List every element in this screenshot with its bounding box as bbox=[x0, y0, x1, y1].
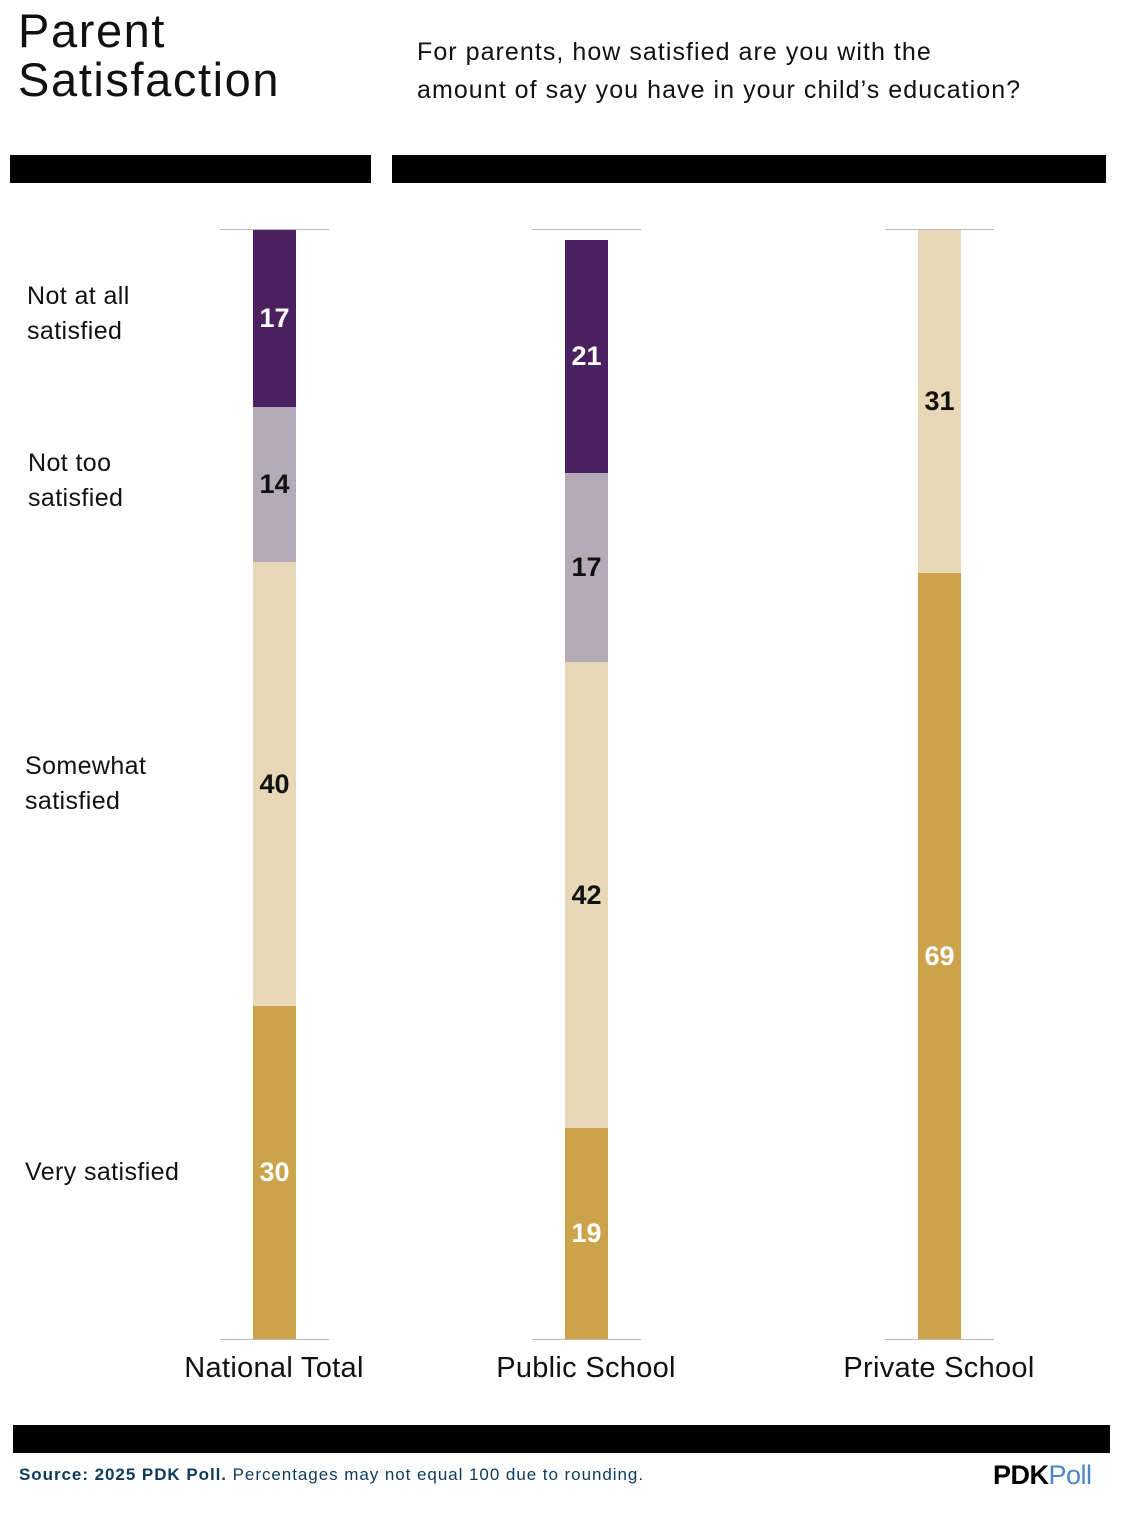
bar: public school: 17 bbox=[571, 552, 602, 582]
label: somewhat bbox=[25, 752, 146, 815]
bar: private school: 31 bbox=[924, 386, 955, 416]
category labels: National Total bbox=[184, 1352, 364, 1384]
source note: Source: 2025 PDK Poll. Percentages may not equal 100 due to rounding. bbox=[19, 1465, 644, 1484]
question text: amount of say you have in your child’s education? bbox=[417, 76, 1021, 104]
label: very: Very satisfied bbox=[25, 1158, 179, 1186]
label: not at all: Not at all bbox=[27, 282, 130, 310]
category labels: Public School bbox=[496, 1352, 676, 1384]
label: somewhat: Somewhat bbox=[25, 752, 146, 780]
label: not too: Not too bbox=[28, 449, 111, 477]
label: not too: satisfied bbox=[28, 484, 123, 512]
header bar left bbox=[10, 155, 371, 183]
category labels: Private School bbox=[843, 1352, 1035, 1384]
bar: national total: 17 bbox=[259, 303, 290, 333]
bar: public school: 19 bbox=[571, 1218, 602, 1248]
title: Satisfaction bbox=[18, 53, 280, 106]
label: not too bbox=[28, 449, 123, 512]
bar: public school: 21 bbox=[571, 341, 602, 371]
legend labels bbox=[25, 282, 179, 1186]
bar: public school bbox=[565, 240, 608, 1339]
title: Parent bbox=[18, 4, 166, 57]
bar: national total bbox=[253, 230, 296, 1339]
bar: private school: 69 bbox=[924, 940, 955, 970]
question text bbox=[417, 38, 1021, 104]
header bar right bbox=[392, 155, 1106, 183]
question text: For parents, how satisfied are you with the bbox=[417, 38, 932, 66]
logo: PDKPoll bbox=[993, 1460, 1092, 1490]
footer bar bbox=[13, 1425, 1110, 1453]
bar: private school bbox=[918, 230, 961, 1339]
bar: national total: 14 bbox=[259, 469, 290, 499]
category labels bbox=[184, 1352, 1035, 1384]
label: somewhat: satisfied bbox=[25, 787, 120, 815]
bar: public school: 42 bbox=[571, 880, 602, 910]
title bbox=[18, 4, 280, 106]
label: not at all bbox=[27, 282, 130, 345]
bar: national total: 40 bbox=[259, 768, 290, 798]
bar: national total: 30 bbox=[259, 1157, 290, 1187]
label: not at all: satisfied bbox=[27, 317, 122, 345]
